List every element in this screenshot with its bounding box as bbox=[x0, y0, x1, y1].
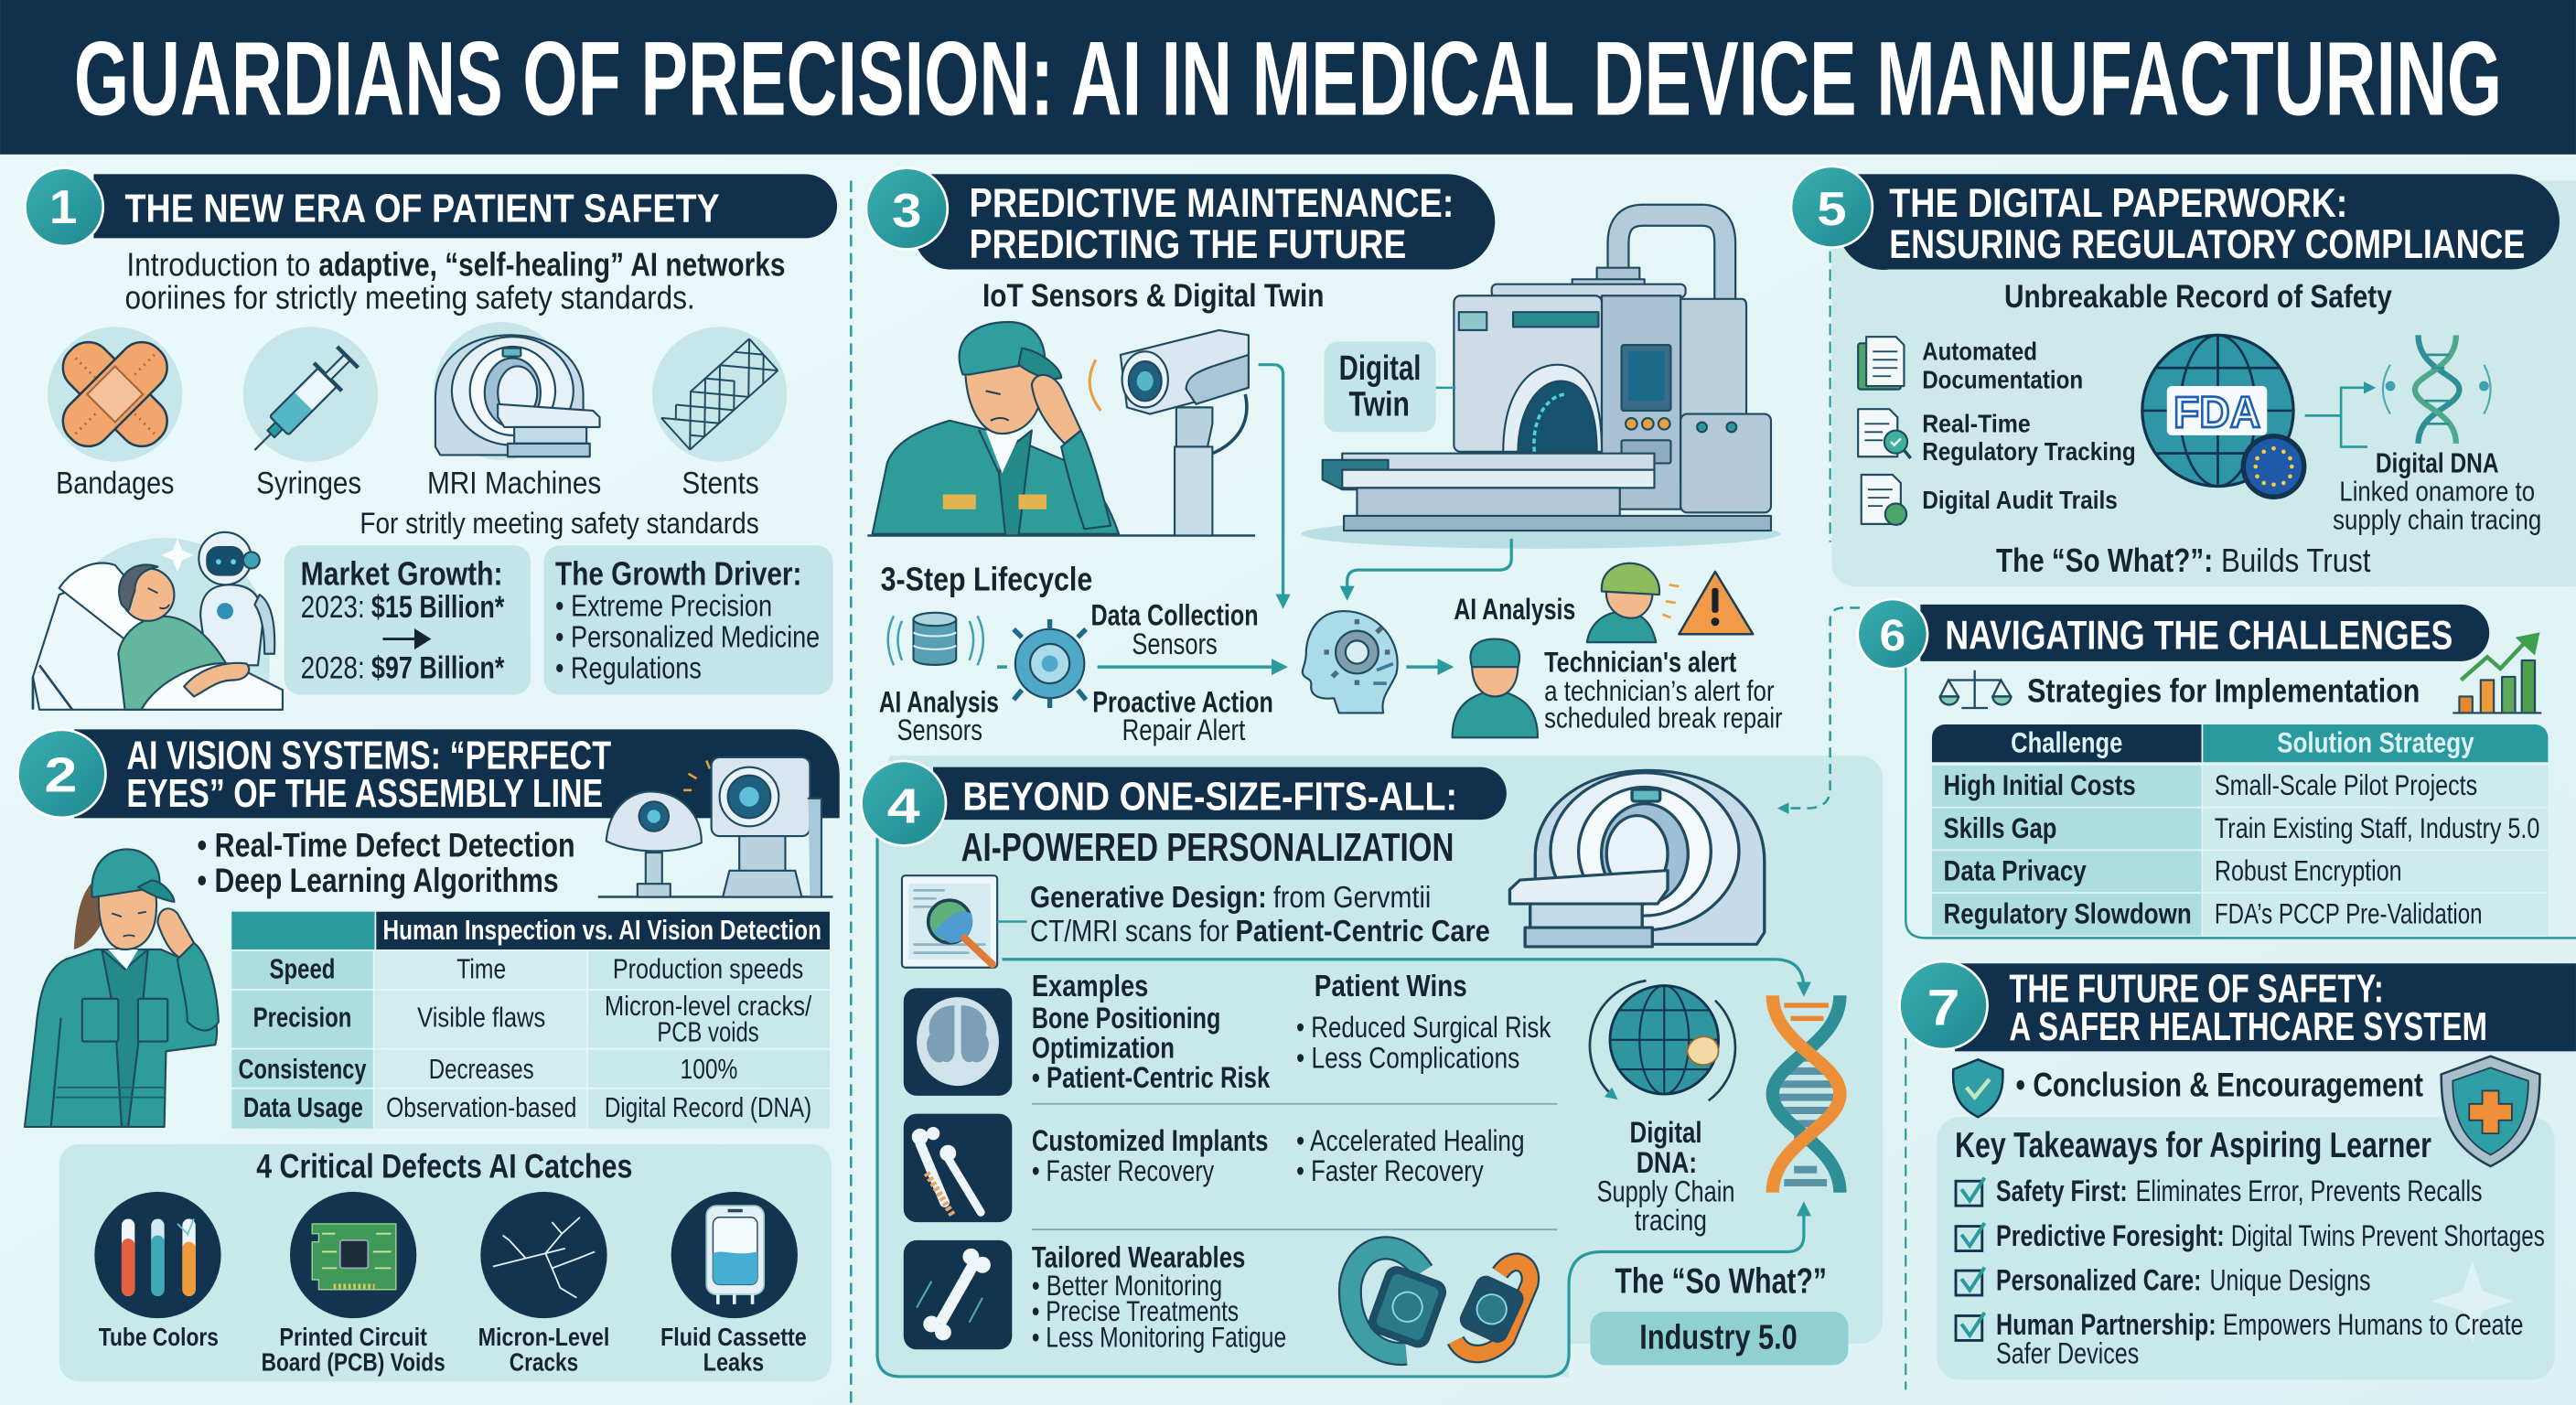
heading: section 5: 5 bbox=[1817, 183, 1847, 236]
heading: section 3: PREDICTIVE MAINTENANCE: bbox=[970, 179, 1454, 226]
step labels: AI analysis: AI Analysis bbox=[879, 686, 999, 719]
table: human vs AI: Decreases bbox=[429, 1054, 534, 1085]
bullet list: vision features: • Real-Time Defect Detection bbox=[198, 827, 575, 864]
heading: section 4: BEYOND ONE-SIZE-FITS-ALL: bbox=[962, 774, 1457, 819]
icon: AI head bbox=[1303, 611, 1398, 713]
text: tailored wearables bbox=[1032, 1241, 1286, 1354]
icon: automated documentation bbox=[1858, 337, 1904, 390]
text: automated documentation: Automated bbox=[1922, 337, 2037, 365]
icon: AI chip gear bbox=[1014, 619, 1086, 708]
step labels: proactive action bbox=[1092, 686, 1273, 746]
table: challenges and solutions bbox=[1932, 724, 2548, 936]
label: fluid cassette leaks: Leaks bbox=[703, 1348, 764, 1377]
text: so what: The “So What?” bbox=[1615, 1261, 1827, 1301]
icon: fluid cassette leaks bbox=[671, 1192, 798, 1318]
bed bbox=[33, 585, 283, 710]
checklist: personalized care bbox=[1956, 1264, 2370, 1297]
heading: section 2: AI VISION SYSTEMS: “PERFECT bbox=[126, 733, 611, 778]
table: challenges and solutions: Small-Scale Pilot Projects bbox=[2215, 769, 2477, 801]
outline connector bbox=[877, 838, 1804, 1377]
callout: industry 5.0: Industry 5.0 bbox=[1639, 1317, 1798, 1356]
checklist: safety first: Safety First: bbox=[1996, 1174, 2128, 1207]
heading: section 7 bbox=[1898, 960, 2576, 1051]
text: customized implants bbox=[1032, 1124, 1268, 1187]
label: micron-level cracks: Cracks bbox=[510, 1348, 578, 1377]
text: digital DNA: Supply Chain bbox=[1597, 1175, 1734, 1208]
table: challenges and solutions: Skills Gap bbox=[1944, 812, 2056, 844]
text: digital DNA bbox=[1597, 1116, 1734, 1237]
arrow: camera to AI bbox=[1259, 365, 1283, 605]
panel: market growth: Market Growth: bbox=[301, 554, 503, 592]
icon: audit trails bbox=[1862, 475, 1906, 525]
label: micron-level cracks bbox=[478, 1323, 609, 1377]
robot bbox=[161, 532, 274, 665]
panel: section 1 new era of patient safety bbox=[24, 166, 837, 710]
heading: section 4: 4 bbox=[887, 779, 920, 834]
step labels: AI analysis bbox=[879, 686, 999, 746]
table: human vs AI: PCB voids bbox=[657, 1017, 759, 1048]
table: human vs AI: Observation-based bbox=[386, 1092, 576, 1123]
panel: market growth: $15 Billion* bbox=[371, 590, 505, 625]
text: patient wins: • Reduced Surgical Risk bbox=[1296, 1011, 1551, 1044]
text: digital DNA: Digital bbox=[1630, 1116, 1702, 1149]
icon: micron-level cracks bbox=[480, 1192, 607, 1318]
table: human vs AI: 100% bbox=[681, 1054, 737, 1085]
label: fluid cassette leaks: Fluid Cassette bbox=[660, 1323, 807, 1351]
icon: tube colors bbox=[94, 1192, 221, 1318]
table: human vs AI: Visible flaws bbox=[417, 1002, 545, 1033]
label: AI analysis: AI Analysis bbox=[1454, 593, 1575, 626]
icon: syringe bbox=[241, 327, 378, 464]
icon: vision cameras bbox=[598, 757, 833, 897]
text: generative design: Generative Design: bbox=[1030, 881, 1267, 915]
step labels: data collection: Sensors bbox=[1132, 627, 1218, 660]
text: examples: Optimization bbox=[1032, 1032, 1175, 1065]
text: examples bbox=[1032, 970, 1270, 1094]
step labels: data collection: Data Collection bbox=[1090, 598, 1259, 631]
text: regulatory tracking: Real-Time bbox=[1922, 409, 2031, 437]
text: regulatory tracking bbox=[1922, 409, 2136, 466]
heading: section 1: THE NEW ERA OF PATIENT SAFETY bbox=[125, 186, 720, 231]
checklist: safety first: Eliminates Error, Prevents Recalls bbox=[2136, 1174, 2483, 1207]
text: customized implants: Customized Implants bbox=[1032, 1124, 1268, 1157]
table: human vs AI: Precision bbox=[253, 1002, 351, 1033]
heading: section 2 bbox=[16, 728, 840, 819]
arrow: section 6 dashed link to section 4 bbox=[1781, 607, 1860, 809]
subheading: key takeaways: Key Takeaways for Aspiring Learner bbox=[1955, 1126, 2431, 1165]
heading: section 7: THE FUTURE OF SAFETY: bbox=[2009, 966, 2384, 1011]
text: tailored wearables: • Better Monitoring bbox=[1032, 1270, 1222, 1302]
subheading: strategies: Strategies for Implementation bbox=[2027, 672, 2420, 710]
label: stents: Stents bbox=[682, 467, 759, 501]
text: technician's alert: Technician's alert bbox=[1544, 647, 1737, 679]
arrow: FDA to DNA bbox=[2305, 388, 2372, 446]
intro text bbox=[125, 246, 785, 316]
panel: 4 critical defects bbox=[59, 1144, 832, 1381]
bullet list: vision features: • Deep Learning Algorithms bbox=[198, 862, 559, 899]
table: human vs AI: Digital Record (DNA) bbox=[605, 1092, 811, 1123]
icon: PCB voids bbox=[290, 1192, 416, 1318]
thumbnail: bone bbox=[904, 1240, 1012, 1349]
icon: regulatory tracking bbox=[1858, 409, 1911, 458]
table: human vs AI: Speed bbox=[270, 953, 335, 984]
panel: section 4 personalization bbox=[860, 756, 1883, 1377]
text: digital DNA bbox=[2333, 447, 2541, 535]
heading: section 1 bbox=[24, 166, 837, 247]
text: customized implants: • Faster Recovery bbox=[1032, 1154, 1215, 1187]
icon: growth chart bbox=[2453, 632, 2541, 713]
icon: generative design scan bbox=[902, 875, 1026, 968]
text: tailored wearables: • Less Monitoring Fatigue bbox=[1032, 1322, 1286, 1354]
icon: helmet worker bbox=[1587, 563, 1679, 642]
intro text: Introduction to bbox=[126, 246, 310, 284]
text: digital DNA: Linked onamore to bbox=[2339, 477, 2535, 508]
icon: digital DNA bbox=[2383, 335, 2491, 444]
icon: DNA helix bbox=[1773, 995, 1840, 1193]
text: technician's alert: scheduled break repair bbox=[1544, 702, 1783, 735]
icon: stent bbox=[652, 327, 787, 462]
label: PCB voids: Board (PCB) Voids bbox=[262, 1348, 445, 1377]
text: digital DNA: supply chain tracing bbox=[2333, 504, 2541, 535]
panel: key takeaways background bbox=[1937, 1117, 2555, 1380]
label: digital twin bbox=[1325, 342, 1455, 432]
checklist: safety first bbox=[1956, 1174, 2483, 1207]
icon: medical shield bbox=[2442, 1056, 2539, 1166]
thumbnail: custom implant bbox=[904, 1114, 1012, 1222]
illustration: tired inspector bbox=[25, 849, 219, 1127]
icon: globe bbox=[1590, 981, 1735, 1100]
subheading: 3-step lifecycle: 3-Step Lifecycle bbox=[881, 561, 1092, 598]
panel: market growth: 2023: bbox=[301, 590, 365, 625]
callout: industry 5.0 bbox=[1590, 1312, 1848, 1365]
panel: market growth bbox=[284, 545, 531, 695]
step labels: AI analysis: Sensors bbox=[897, 713, 982, 746]
text: generative design bbox=[1030, 881, 1490, 949]
heading: section 4 bbox=[860, 760, 1507, 870]
label: fluid cassette leaks bbox=[660, 1323, 807, 1377]
dashed divider between columns bbox=[850, 181, 852, 1404]
label: PCB voids bbox=[262, 1323, 445, 1377]
text: patient wins: • Less Complications bbox=[1296, 1041, 1519, 1074]
table: human vs AI: Human Inspection vs. AI Vision Detection bbox=[382, 915, 821, 946]
arrow: design to DNA bbox=[1003, 960, 1804, 992]
text: examples: • Patient-Centric Risk bbox=[1032, 1061, 1270, 1094]
checklist: predictive foresight: Predictive Foresight: bbox=[1996, 1219, 2225, 1252]
intro text: ooriines for strictly meeting safety standards. bbox=[125, 279, 695, 316]
icon: FDA globe bbox=[2142, 335, 2306, 499]
label: syringes: Syringes bbox=[256, 467, 361, 501]
table: challenges and solutions: Robust Encryption bbox=[2215, 855, 2402, 887]
panel: growth driver bbox=[543, 545, 833, 695]
table: challenges and solutions: Data Privacy bbox=[1944, 855, 2087, 887]
icon: technician bbox=[1453, 639, 1538, 737]
text: generative design: CT/MRI scans for bbox=[1030, 915, 1229, 949]
icon: IoT camera bbox=[1089, 330, 1249, 535]
icon: check shield bbox=[1953, 1059, 2002, 1117]
heading: section 4: AI-POWERED PERSONALIZATION bbox=[961, 825, 1454, 870]
panel: section 3 predictive maintenance bbox=[865, 166, 1783, 746]
panel: growth driver: • Extreme Precision bbox=[555, 589, 772, 623]
panel: growth driver: The Growth Driver: bbox=[555, 554, 801, 592]
checklist: personalized care: Personalized Care: bbox=[1996, 1264, 2201, 1297]
heading: section 7: 7 bbox=[1927, 980, 1960, 1036]
text: digital DNA: Digital DNA bbox=[2376, 447, 2499, 478]
label: bandages: Bandages bbox=[56, 467, 174, 501]
heading: section 3: PREDICTING THE FUTURE bbox=[970, 220, 1406, 267]
table: human vs AI: Time bbox=[456, 953, 506, 984]
text: tailored wearables: • Precise Treatments bbox=[1032, 1295, 1239, 1327]
panel: market growth: $97 Billion* bbox=[371, 651, 505, 686]
thumbnail: brain scan bbox=[904, 988, 1012, 1096]
icon: scales bbox=[1940, 670, 2011, 708]
text: examples: Bone Positioning bbox=[1032, 1002, 1220, 1035]
panel: growth driver: • Personalized Medicine bbox=[555, 621, 820, 655]
label: micron-level cracks: Micron-Level bbox=[478, 1323, 609, 1351]
illustration: patient with robot bbox=[33, 532, 283, 710]
text: generative design: from Gervmtii bbox=[1273, 881, 1431, 915]
bullet list: vision features bbox=[198, 827, 575, 899]
table: challenges and solutions: Regulatory Slowdown bbox=[1944, 897, 2192, 929]
text: so what builds trust: The “So What?”: bbox=[1996, 542, 2213, 579]
heading: section 2: 2 bbox=[45, 748, 77, 803]
text: patient wins bbox=[1296, 970, 1551, 1074]
text: regulatory tracking: Regulatory Tracking bbox=[1922, 437, 2136, 466]
table: human vs AI bbox=[231, 912, 830, 1129]
heading: section 1: 1 bbox=[49, 181, 77, 234]
text: so what builds trust: Builds Trust bbox=[2221, 542, 2370, 579]
intro text: adaptive, “self-healing” AI networks bbox=[318, 246, 785, 284]
label: MRI machines: MRI Machines bbox=[427, 467, 601, 501]
panel: section 5 digital paperwork bbox=[1790, 165, 2576, 586]
heading: section 3: 3 bbox=[892, 185, 922, 238]
icon: MRI scanner bbox=[1509, 770, 1765, 947]
text: implant wins: • Faster Recovery bbox=[1296, 1154, 1484, 1187]
illustration: digital twin machine bbox=[1301, 215, 1781, 549]
panel: section 7 future of safety bbox=[1898, 960, 2576, 1389]
text: audit trails: Digital Audit Trails bbox=[1922, 486, 2118, 514]
patient bbox=[118, 617, 233, 710]
subheading: IoT sensors: IoT Sensors & Digital Twin bbox=[982, 278, 1325, 314]
text: digital DNA: tracing bbox=[1635, 1204, 1707, 1237]
panel: 4 critical defects: 4 Critical Defects AI Catches bbox=[256, 1148, 632, 1185]
table: challenges and solutions: High Initial Costs bbox=[1944, 769, 2136, 801]
step labels: data collection bbox=[1090, 598, 1259, 660]
text: automated documentation: Documentation bbox=[1922, 366, 2083, 394]
caption: For stritly meeting safety standards bbox=[360, 507, 759, 540]
label: PCB voids: Printed Circuit bbox=[279, 1323, 427, 1351]
checklist: human partnership: Human Partnership: bbox=[1996, 1308, 2216, 1341]
heading: section 6 bbox=[1856, 598, 2489, 670]
checklist: human partnership: Safer Devices bbox=[1996, 1337, 2139, 1370]
arrow: lifecycle flow bbox=[997, 666, 1283, 668]
icon: database sensors bbox=[888, 613, 983, 665]
icon: FDA globe: FDA bbox=[2174, 388, 2260, 437]
heading: section 6: 6 bbox=[1880, 611, 1905, 660]
table: human vs AI: Consistency bbox=[238, 1054, 367, 1085]
text: implant wins bbox=[1296, 1124, 1525, 1187]
heading: section 2: EYES” OF THE ASSEMBLY LINE bbox=[126, 771, 603, 816]
label: digital twin: Twin bbox=[1348, 384, 1410, 423]
table: human vs AI: Data Usage bbox=[243, 1092, 363, 1123]
text: tailored wearables: Tailored Wearables bbox=[1032, 1241, 1245, 1274]
checklist: predictive foresight bbox=[1956, 1219, 2545, 1252]
arrow: twin to AI bbox=[1347, 539, 1511, 596]
panel: section 2 AI vision systems bbox=[16, 728, 840, 1381]
illustration: tired technician bbox=[867, 322, 1255, 535]
heading: section 6: NAVIGATING THE CHALLENGES bbox=[1945, 611, 2453, 658]
table: human vs AI: Micron-level cracks/ bbox=[605, 991, 812, 1022]
label: tube colors: Tube Colors bbox=[99, 1323, 219, 1351]
text: patient wins: Patient Wins bbox=[1315, 970, 1467, 1003]
text: implant wins: • Accelerated Healing bbox=[1296, 1124, 1525, 1157]
icon: bandages bbox=[48, 327, 182, 462]
arrow: market growth bbox=[382, 631, 429, 648]
text: generative design: Patient-Centric Care bbox=[1236, 915, 1490, 949]
table: challenges and solutions: FDA’s PCCP Pre-Validation bbox=[2215, 897, 2483, 929]
heading: section 5 bbox=[1790, 165, 2560, 270]
panel: growth driver: • Regulations bbox=[555, 652, 702, 686]
title banner bbox=[0, 0, 2576, 155]
panel: section 6 navigating challenges bbox=[1856, 598, 2576, 938]
icon: wearables bbox=[1350, 1248, 1530, 1354]
text: technician's alert bbox=[1544, 647, 1783, 735]
sparkle bbox=[2431, 1260, 2514, 1344]
panel: market growth: 2028: bbox=[301, 651, 365, 686]
subheading: conclusion: • Conclusion & Encouragement bbox=[2016, 1067, 2423, 1104]
checklist: personalized care: Unique Designs bbox=[2209, 1264, 2370, 1297]
heading: section 5: THE DIGITAL PAPERWORK: bbox=[1889, 179, 2347, 226]
arrow: AI to technician bbox=[1406, 666, 1449, 668]
step labels: proactive action: Proactive Action bbox=[1092, 686, 1273, 719]
icon: MRI machine bbox=[434, 322, 600, 460]
table: challenges and solutions: Solution Strategy bbox=[2277, 727, 2474, 759]
subheading: unbreakable record: Unbreakable Record of Safety bbox=[2004, 279, 2392, 315]
icon: warning triangle bbox=[1679, 572, 1753, 634]
text: automated documentation bbox=[1922, 337, 2083, 394]
text: technician's alert: a technician’s alert for bbox=[1544, 675, 1775, 707]
step labels: proactive action: Repair Alert bbox=[1122, 713, 1245, 746]
table: human vs AI: Production speeds bbox=[613, 953, 803, 984]
checklist: human partnership bbox=[1956, 1308, 2523, 1370]
text: digital DNA: DNA: bbox=[1637, 1146, 1697, 1179]
table: challenges and solutions: Challenge bbox=[2011, 727, 2122, 759]
heading: section 3 bbox=[865, 166, 1495, 270]
text: examples: Examples bbox=[1032, 970, 1148, 1003]
label: digital twin: Digital bbox=[1339, 349, 1421, 387]
